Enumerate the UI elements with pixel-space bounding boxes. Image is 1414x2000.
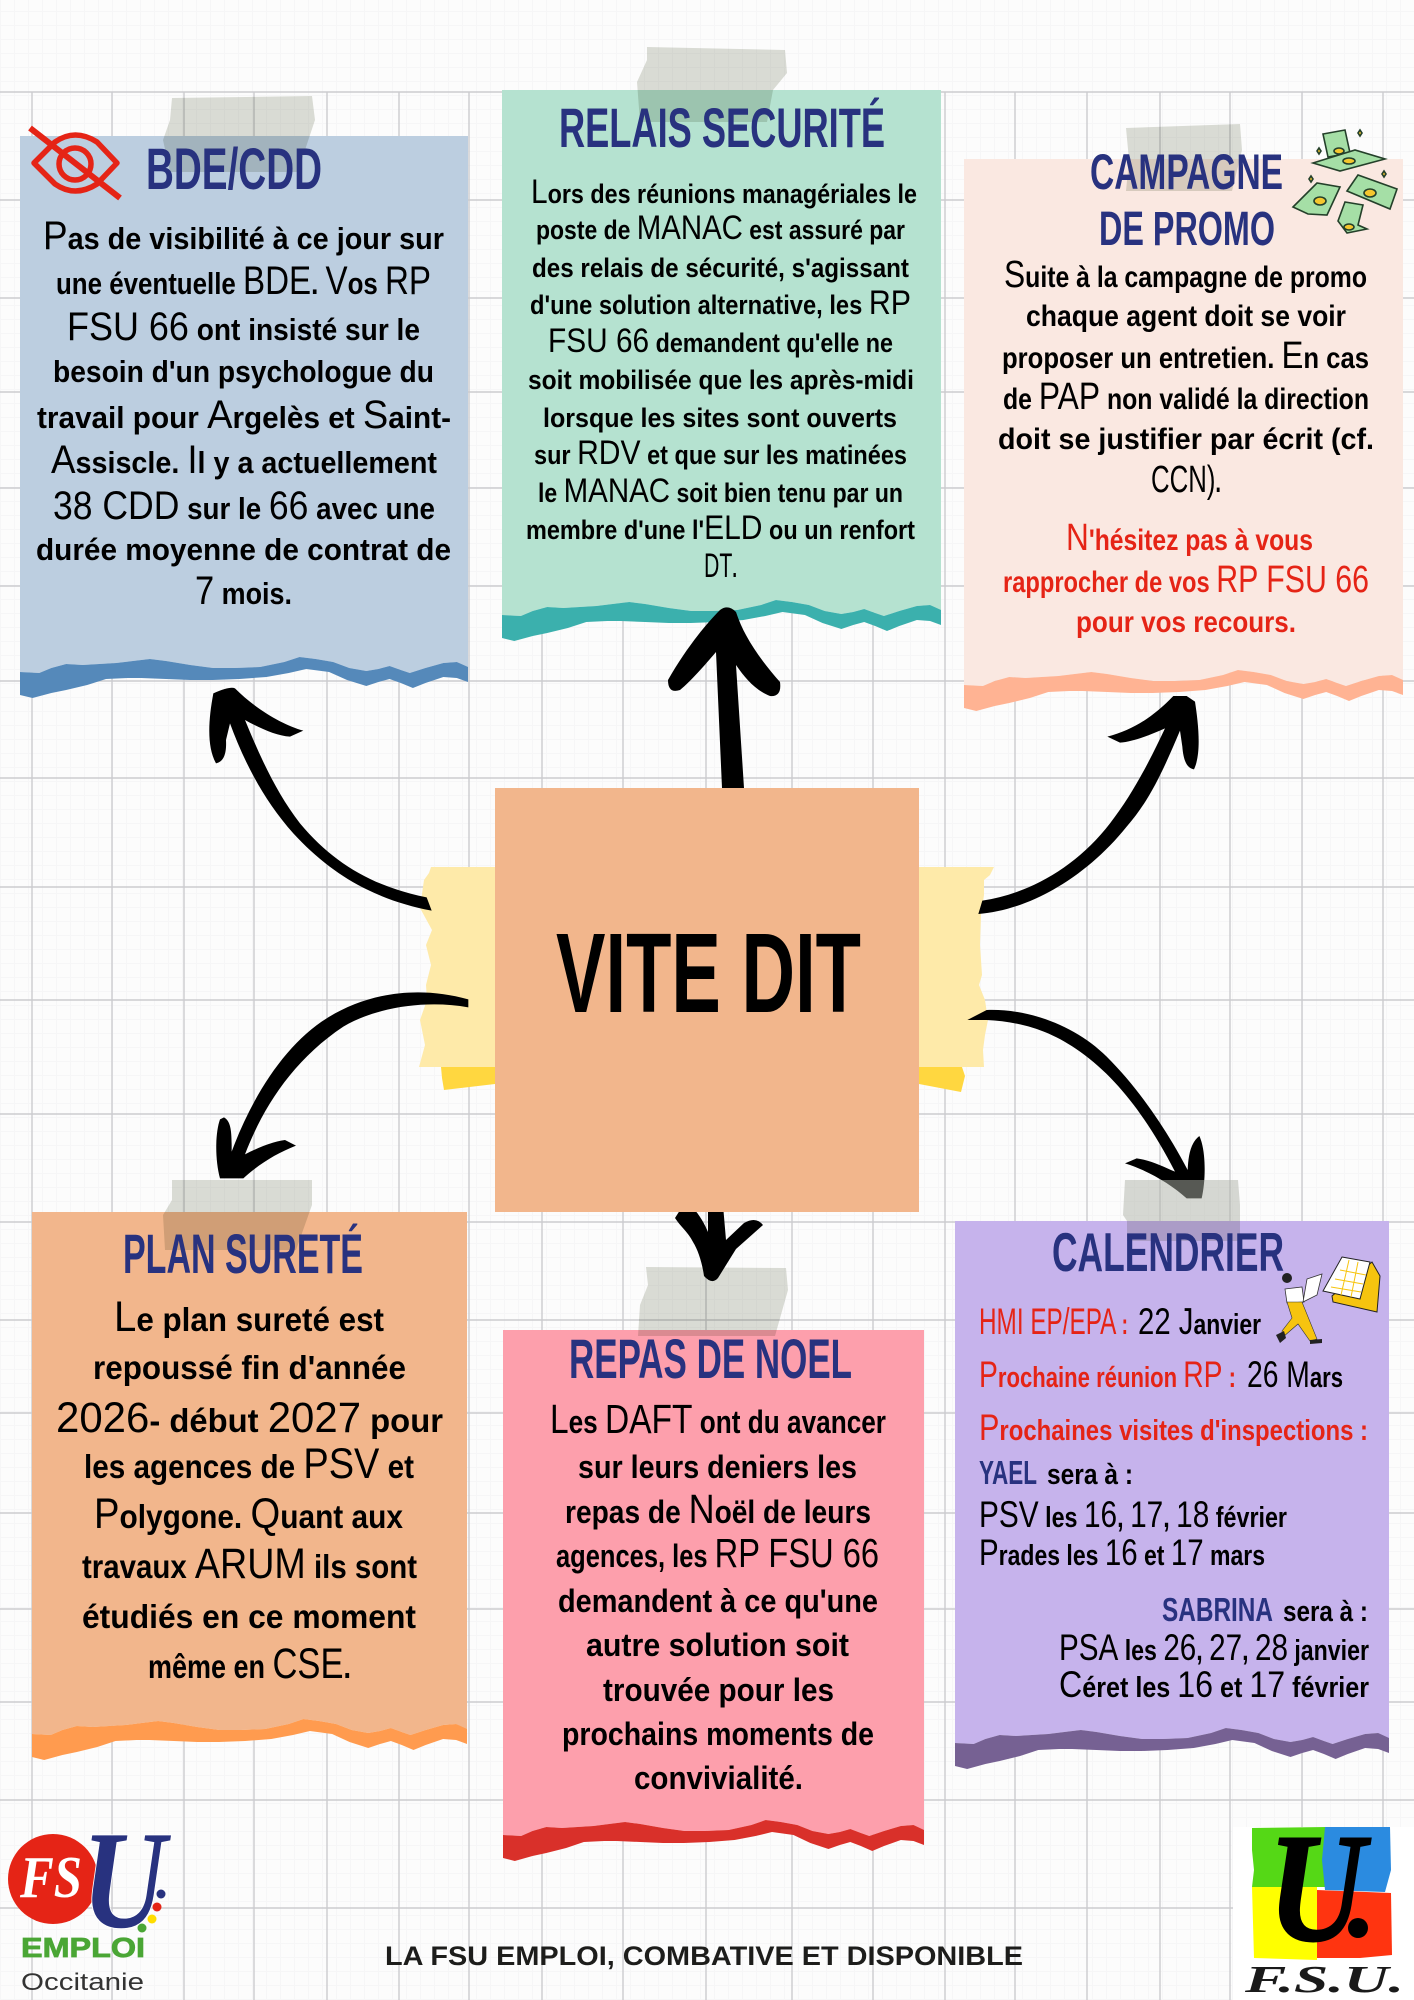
heading: relais sécurité: RELAIS SECURITÉ — [559, 96, 885, 159]
text: campagne callout: N'hésitez pas à vous — [1066, 516, 1313, 559]
tape on calendrier panel — [1123, 1180, 1240, 1241]
text: calendrier dates: YAEL — [979, 1454, 1037, 1491]
text: repas de noel body: Les DAFT ont du avancer — [550, 1396, 886, 1442]
text: plan sureté body: travaux ARUM ils sont — [82, 1540, 417, 1587]
logo: FSU Emploi Occitanie: FS — [19, 1844, 82, 1910]
text: relais sécurité body: le MANAC soit bien tenu par un — [538, 472, 903, 510]
footer slogan: LA FSU EMPLOI, COMBATIVE ET DISPONIBLE — [385, 1941, 1023, 1971]
panel: relais sécurité — [502, 90, 941, 641]
text: BDE/CDD body: FSU 66 ont insisté sur le — [67, 305, 420, 349]
text: calendrier dates — [979, 1300, 1369, 1705]
torn edge — [955, 1728, 1389, 1769]
text: plan sureté body: repoussé fin d'année — [93, 1349, 406, 1386]
text: calendrier dates: PSA les 26, 27, 28 janvier — [1059, 1626, 1369, 1668]
yellow tape behind central note — [419, 867, 994, 1092]
arrow: to relais sécurité — [668, 607, 780, 788]
text: repas de noel body: repas de Noël de leurs — [565, 1486, 871, 1532]
text: calendrier dates: HMI EP/EPA : — [979, 1300, 1128, 1342]
text: campagne body: de PAP non validé la direction — [1003, 375, 1369, 418]
text: plan sureté body: étudiés en ce moment — [82, 1598, 416, 1635]
panel: repas de noel — [503, 1330, 924, 1861]
panel background — [503, 1330, 924, 1836]
arrow: to calendrier — [967, 1010, 1205, 1198]
heading: BDE/CDD: BDE/CDD — [146, 137, 322, 202]
text: campagne body — [998, 253, 1374, 501]
text: campagne body: doit se justifier par écrit (cf. — [998, 423, 1374, 456]
text: relais sécurité body: des relais de sécurité, s'agissant — [532, 253, 909, 283]
text: calendrier dates: sera à : — [1047, 1459, 1133, 1491]
text: campagne callout — [1003, 516, 1369, 639]
icon: crossed-out eye — [30, 128, 120, 198]
text: campagne body: CCN). — [1151, 458, 1221, 501]
text: relais sécurité body: FSU 66 demandent qu'elle ne — [548, 322, 893, 360]
panel: campagne de promo — [964, 159, 1403, 711]
text: repas de noel body: prochains moments de — [562, 1716, 874, 1752]
text: repas de noel body: demandent à ce qu'une — [558, 1583, 878, 1619]
text: repas de noel body: agences, les RP FSU 66 — [556, 1530, 879, 1576]
torn edge — [964, 670, 1403, 711]
panel background — [955, 1221, 1389, 1744]
text: plan sureté body: les agences de PSV et — [84, 1440, 414, 1487]
text: BDE/CDD body: une éventuelle BDE. Vos RP — [56, 259, 431, 303]
panel background — [20, 136, 468, 673]
text: plan sureté body: même en CSE. — [148, 1640, 351, 1687]
arrow: to repas de noel — [675, 1205, 763, 1281]
text: repas de noel body — [550, 1396, 886, 1796]
text: calendrier dates: Prochaine réunion RP : — [979, 1353, 1236, 1395]
torn edge — [503, 1820, 924, 1861]
heading: calendrier: CALENDRIER — [1052, 1221, 1284, 1283]
heading: campagne de promo — [1090, 144, 1283, 256]
panel background — [502, 90, 941, 616]
text: calendrier dates: 26 Mars — [1247, 1353, 1343, 1395]
panel: plan sureté — [32, 1212, 467, 1760]
text: calendrier dates: sera à : — [1283, 1596, 1368, 1628]
heading: plan sureté: PLAN SURETÉ — [123, 1222, 363, 1285]
central note — [495, 788, 919, 1212]
arrow: to campagne de promo — [978, 696, 1199, 914]
text: campagne body: proposer un entretien. En cas — [1002, 334, 1369, 377]
panel: calendrier — [955, 1221, 1389, 1769]
logo: FSU Emploi Occitanie: U — [82, 1803, 172, 1958]
heading: campagne de promo: CAMPAGNE — [1090, 144, 1283, 200]
text: relais sécurité body: lorsque les sites sont ouverts — [543, 403, 897, 433]
text: calendrier dates: Céret les 16 et 17 février — [1059, 1663, 1369, 1705]
icon: flying banknotes — [1293, 130, 1397, 233]
panel: BDE/CDD — [20, 136, 468, 698]
arrow: to plan sureté — [216, 992, 468, 1178]
text: relais sécurité body: membre d'une l'ELD ou un renfort — [526, 509, 915, 547]
text: plan sureté body: Polygone. Quant aux — [94, 1490, 404, 1537]
torn edge — [32, 1719, 467, 1760]
text: BDE/CDD body: 7 mois. — [195, 569, 292, 613]
text: plan sureté body: 2026- début 2027 pour — [56, 1394, 443, 1441]
text: plan sureté body — [56, 1293, 443, 1687]
grey tape pieces — [163, 47, 1242, 1336]
text: campagne callout: rapprocher de vos RP FSU 66 — [1003, 558, 1369, 601]
torn edge — [502, 600, 941, 641]
text: relais sécurité body: DT. — [704, 547, 737, 585]
text: campagne body: chaque agent doit se voir — [1026, 300, 1346, 333]
icon: person with calendar — [1276, 1257, 1380, 1344]
text: BDE/CDD body: 38 CDD sur le 66 avec une — [53, 484, 435, 528]
text: BDE/CDD body: besoin d'un psychologue du — [53, 354, 434, 389]
text: campagne callout: pour vos recours. — [1076, 606, 1296, 639]
text: relais sécurité body: poste de MANAC est assuré par — [536, 209, 905, 247]
note background — [495, 788, 919, 1212]
text: calendrier dates: PSV les 16, 17, 18 février — [979, 1493, 1287, 1535]
torn edge — [20, 657, 468, 698]
logo: FSU Emploi Occitanie — [8, 1803, 172, 1996]
heading: campagne de promo: DE PROMO — [1099, 203, 1275, 256]
logo: FSU Emploi Occitanie: EMPLOI — [21, 1932, 145, 1963]
text: repas de noel body: convivialité. — [634, 1760, 803, 1796]
text: BDE/CDD body: Assiscle. Il y a actuellement — [51, 438, 437, 482]
logo: U.F.S.U.: U — [1268, 1802, 1371, 1974]
text: calendrier dates: SABRINA — [1162, 1591, 1273, 1628]
text: BDE/CDD body: travail pour Argelès et Saint- — [37, 393, 451, 437]
text: relais sécurité body — [526, 173, 917, 585]
text: BDE/CDD body — [36, 214, 451, 613]
heading: repas de noel: REPAS DE NOEL — [569, 1327, 852, 1390]
text: repas de noel body: sur leurs deniers les — [578, 1449, 857, 1485]
logo: U.F.S.U. — [1233, 1802, 1414, 2000]
logo: FSU Emploi Occitanie: Occitanie — [21, 1969, 144, 1996]
text: relais sécurité body: sur RDV et que sur les matinées — [534, 434, 907, 472]
text: calendrier dates: Prades les 16 et 17 mars — [979, 1531, 1265, 1573]
text: relais sécurité body: d'une solution alternative, les RP — [530, 284, 911, 322]
text: plan sureté body: Le plan sureté est — [114, 1293, 384, 1340]
text: BDE/CDD body: durée moyenne de contrat de — [36, 532, 451, 567]
main title: VITE DIT — [556, 910, 861, 1036]
text: repas de noel body: trouvée pour les — [603, 1672, 834, 1708]
text: calendrier dates: 22 Janvier — [1138, 1300, 1261, 1342]
panel background — [32, 1212, 467, 1735]
panel background — [964, 159, 1403, 686]
text: relais sécurité body: Lors des réunions managériales le — [531, 173, 917, 211]
text: BDE/CDD body: Pas de visibilité à ce jour sur — [43, 214, 444, 258]
logo: U.F.S.U.: F.S.U. — [1243, 1959, 1404, 2000]
text: repas de noel body: autre solution soit — [586, 1627, 849, 1663]
arrow: to BDE/CDD — [209, 688, 432, 911]
text: relais sécurité body: soit mobilisée que les après-midi — [528, 365, 914, 395]
